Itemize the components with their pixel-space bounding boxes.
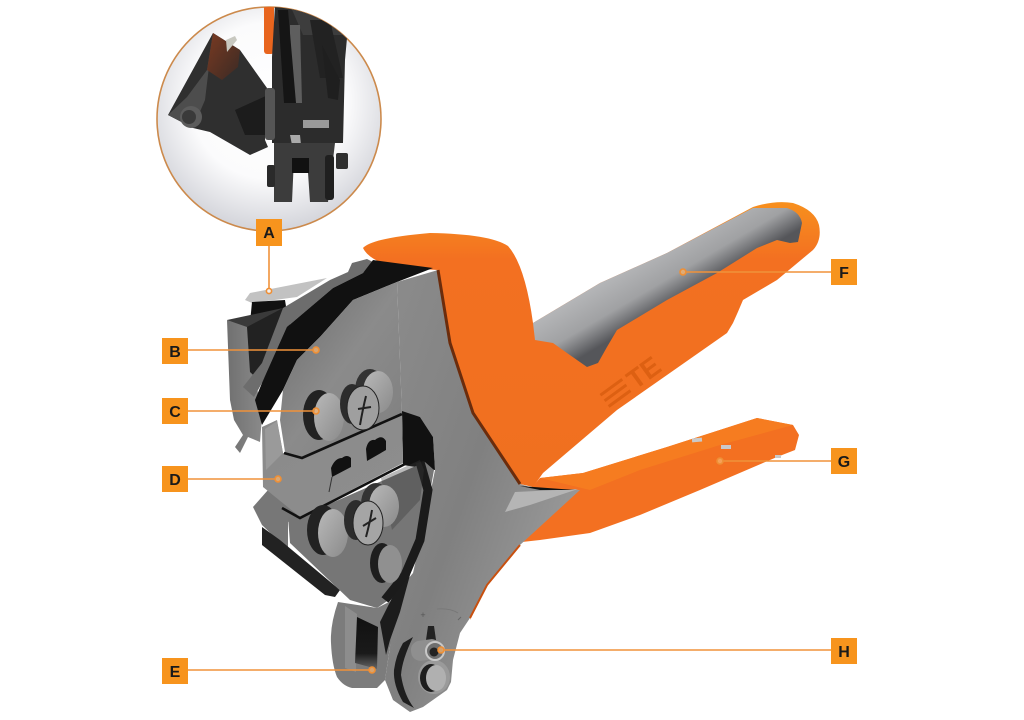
callout C: C — [169, 404, 181, 421]
callout G: G — [838, 454, 850, 471]
upper eccentric screws (C) — [303, 390, 335, 440]
callout A: A — [263, 225, 275, 242]
callout D — [162, 466, 281, 492]
right side body plate — [385, 270, 580, 712]
front plate with cam screws (B) — [280, 282, 402, 457]
TE logo embossed on handle — [596, 351, 667, 413]
black slot around die — [402, 411, 435, 470]
strap — [262, 527, 340, 597]
main tool: metal head and body — [227, 259, 580, 712]
callout E: E — [170, 664, 181, 681]
inset circle: detail view of the locator — [157, 5, 381, 231]
callout C — [162, 398, 319, 424]
adjustment wheel and scale (H) — [394, 609, 461, 708]
lower plate — [288, 462, 434, 608]
adjustment wheel and scale (H): + — [420, 610, 426, 620]
callout B: B — [169, 344, 181, 361]
black arc behind the front plate — [255, 260, 433, 425]
callout D: D — [169, 472, 181, 489]
callout A — [256, 219, 282, 294]
callout E — [162, 658, 375, 684]
callout H — [438, 638, 857, 664]
lower block — [253, 490, 305, 550]
TE logo embossed on handle: TE — [621, 351, 667, 395]
callout F: F — [839, 265, 849, 282]
callout H: H — [838, 644, 850, 661]
roller assembly (E) — [331, 575, 410, 688]
main tool: upper orange handle — [363, 202, 820, 487]
outer grey band — [243, 259, 373, 397]
callout B — [162, 338, 319, 364]
die set (D) — [262, 415, 403, 517]
callout F — [680, 259, 857, 285]
callout G — [717, 448, 857, 474]
main tool: lower orange handle — [470, 418, 799, 620]
grey grip on upper handle — [533, 208, 802, 367]
lower eccentric screws — [307, 505, 339, 555]
